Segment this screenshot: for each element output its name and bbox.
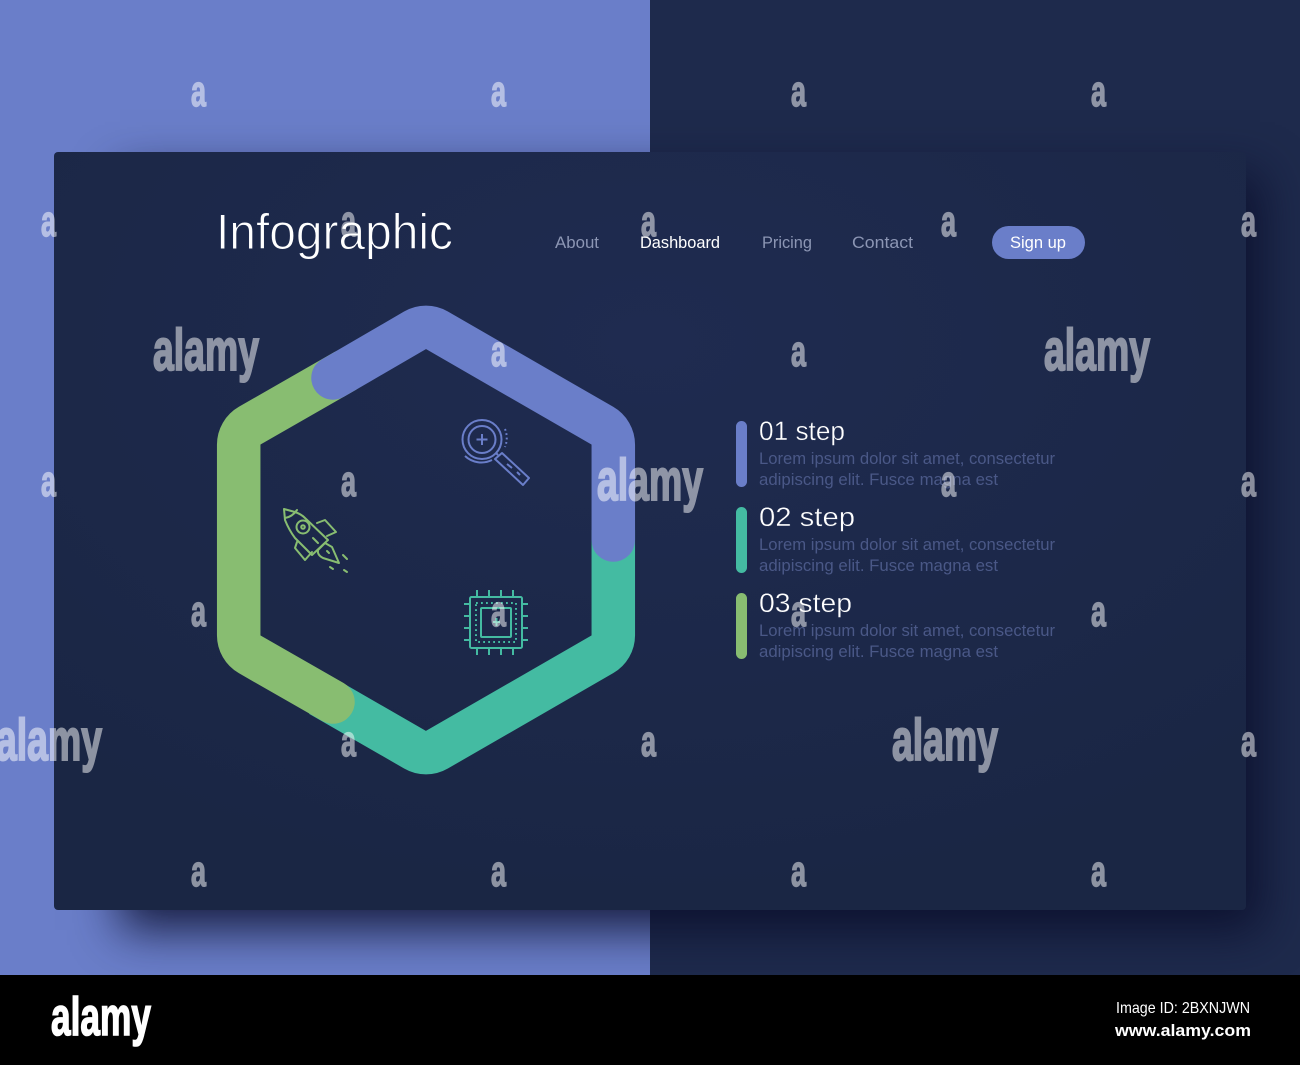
image id: Image ID: 2BXNJWN — [1116, 1000, 1250, 1017]
watermark overlay: a — [1091, 847, 1106, 896]
watermark overlay: a — [491, 327, 506, 376]
footer bar — [0, 975, 1300, 1065]
hexagon chart — [239, 327, 613, 753]
icon: microchip — [464, 590, 528, 655]
watermark overlay: a — [641, 197, 656, 246]
website: www.alamy.com — [1114, 1021, 1251, 1040]
segment: step 3 green — [239, 371, 345, 702]
watermark overlay: a — [1091, 587, 1106, 636]
navigation menu — [555, 233, 913, 252]
title: Infographic — [216, 204, 453, 260]
left blue band — [0, 0, 650, 975]
watermark overlay: a — [341, 717, 356, 766]
legend: step 3: 03 step — [759, 588, 852, 618]
legend: step 2 — [736, 502, 1055, 575]
legend: step 3 — [736, 588, 1055, 661]
legend: step 3: adipiscing elit. Fusce magna est — [759, 643, 998, 661]
watermark overlay: a — [941, 197, 956, 246]
watermark overlay: a — [791, 327, 806, 376]
watermark overlay: alamy — [0, 708, 102, 773]
watermark overlay: a — [491, 847, 506, 896]
legend: step 1: Lorem ipsum dolor sit amet, consectetur — [759, 450, 1055, 468]
nav item: Contact: Contact — [852, 233, 913, 252]
icon: magnifier — [462, 420, 529, 485]
segment: step 2 teal — [320, 530, 613, 753]
watermark overlay: a — [1091, 67, 1106, 116]
watermark overlay: a — [41, 197, 56, 246]
watermark overlay: a — [1241, 717, 1256, 766]
watermark overlay: a — [341, 197, 356, 246]
watermark overlay: a — [791, 847, 806, 896]
legend: step 2: Lorem ipsum dolor sit amet, consectetur — [759, 536, 1055, 554]
watermark overlay: a — [641, 717, 656, 766]
sign up button: Sign up — [1010, 233, 1066, 252]
watermark overlay: alamy — [892, 708, 998, 773]
watermark overlay — [0, 67, 1256, 896]
watermark overlay: a — [491, 587, 506, 636]
legend: step 3: Lorem ipsum dolor sit amet, consectetur — [759, 622, 1055, 640]
legend: step 1: adipiscing elit. Fusce magna est — [759, 471, 998, 489]
sign up button — [992, 226, 1085, 259]
panel: main card — [54, 152, 1246, 910]
segment: step 1 blue — [333, 327, 613, 540]
watermark overlay: a — [1241, 457, 1256, 506]
legend: step 2: adipiscing elit. Fusce magna est — [759, 557, 998, 575]
footer logo: alamy — [51, 987, 151, 1047]
watermark overlay: a — [1241, 197, 1256, 246]
watermark overlay: alamy — [597, 448, 703, 513]
nav item: Dashboard: Dashboard — [640, 233, 720, 252]
card shadow — [120, 175, 1220, 890]
nav item: About: About — [555, 233, 599, 252]
legend: step 1 — [736, 416, 1055, 489]
watermark overlay: a — [491, 67, 506, 116]
icon: rocket — [284, 509, 347, 572]
watermark overlay: a — [191, 847, 206, 896]
watermark overlay: a — [191, 67, 206, 116]
watermark overlay: a — [41, 457, 56, 506]
watermark overlay: a — [191, 587, 206, 636]
legend: step 2: 02 step — [759, 502, 855, 532]
watermark overlay: alamy — [153, 318, 259, 383]
watermark overlay: a — [791, 587, 806, 636]
watermark overlay: a — [941, 457, 956, 506]
watermark overlay: a — [791, 67, 806, 116]
nav item: Pricing: Pricing — [762, 233, 812, 252]
legend: step 1: 01 step — [759, 416, 845, 446]
watermark overlay: a — [341, 457, 356, 506]
watermark overlay: alamy — [1044, 318, 1150, 383]
